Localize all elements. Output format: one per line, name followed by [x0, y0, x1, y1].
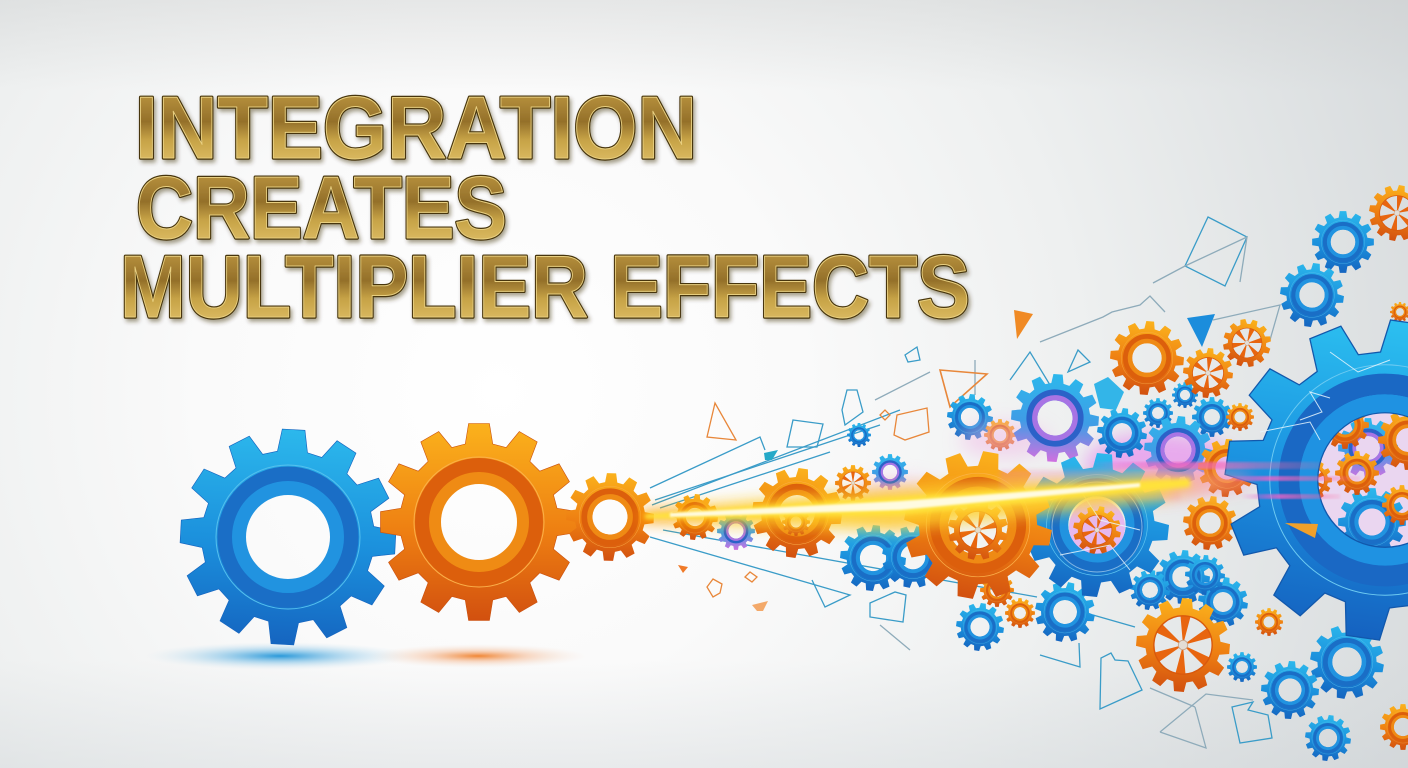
gear: blue mini: [1143, 398, 1173, 428]
gear: orange spoked lower: [1132, 594, 1234, 696]
gear: orange centre inside hole: [1335, 451, 1379, 495]
inner gear in orange 1: [782, 508, 810, 536]
inner detail of blue centre gear: [1069, 499, 1125, 555]
gear: blue large centre: [1018, 446, 1176, 604]
gear: orange edge: [1380, 704, 1408, 750]
title: MULTIPLIER EFFECTS: [120, 237, 970, 336]
title: INTEGRATION: [135, 78, 697, 177]
gear: orange top inside hole: [1321, 401, 1369, 449]
gear: blue small bottom: [953, 600, 1007, 654]
white cracks on gears: [1050, 352, 1390, 572]
gear: blue pair left: [837, 522, 909, 594]
gear: cyan small: [1094, 405, 1150, 461]
big blue gear: [1205, 300, 1408, 660]
gear: blue purple medium: [872, 454, 908, 490]
small triangles and fragments: [678, 310, 1215, 611]
gear: small orange: [565, 472, 655, 562]
gear: orange medium: [835, 465, 871, 501]
gear: orange spoked top: [1181, 346, 1235, 400]
gear: orange right low: [1382, 485, 1408, 525]
gear: blue lower middle: [1030, 577, 1100, 647]
gear: cyan purple cluster left: [1008, 371, 1102, 465]
wireframe lines and polygons: [650, 217, 1280, 748]
gear: orange swirl: [1216, 312, 1278, 374]
gear: purple blue upper: [1141, 413, 1215, 487]
title: [120, 78, 970, 336]
title: CREATES: [136, 158, 507, 257]
gear: blue cluster behind spoked: [1195, 574, 1251, 630]
gear: blue cluster lower right: [1184, 554, 1226, 596]
gear: orange mini: [1226, 403, 1254, 431]
title: MULTIPLIER EFFECTS: [120, 237, 970, 336]
gear: blue cluster middle: [1154, 548, 1212, 606]
gear: blue lower right large: [1304, 619, 1390, 705]
pink glow behind cluster: [850, 422, 1235, 522]
energy beam: [640, 470, 1250, 530]
gear: spoked inside hole: [1292, 460, 1332, 500]
gear: blue pair right: [876, 520, 950, 594]
gear: blue cluster lower left: [1127, 567, 1173, 613]
gear shadows: [145, 642, 588, 670]
gear: blue lower right: [1259, 659, 1321, 721]
far-field gears: [847, 181, 1408, 764]
gear: orange small ring: [980, 573, 1014, 607]
big gear hole contents: [1292, 401, 1408, 556]
gear: tiny orange right: [1390, 302, 1408, 322]
gear: blue mini 2: [1172, 382, 1198, 408]
inner gear in blue centre: [1069, 502, 1125, 558]
inner gear in orange centre: [942, 494, 1014, 566]
title: INTEGRATION: [135, 78, 697, 177]
primary gears: [175, 423, 655, 650]
gear: blue right: [1276, 259, 1348, 331]
gear: blue purple small: [717, 512, 755, 550]
gear: orange tiny lower: [1255, 608, 1283, 636]
gear: blue upper right: [1312, 211, 1374, 273]
gear: purple inside hole: [1338, 418, 1398, 478]
gear: blue top cluster: [945, 392, 995, 442]
gear: blue bottom: [1302, 712, 1354, 764]
gear: large blue: [175, 424, 401, 650]
gear: orange lower centre: [1180, 493, 1240, 553]
gear: large orange: [380, 423, 578, 621]
gear: dark blue behind: [1192, 397, 1232, 437]
small orange triangle on big gear: [1285, 523, 1318, 538]
gear: orange right of centre: [1196, 437, 1258, 499]
gear: blue small centre: [847, 423, 871, 447]
central gear cluster: [670, 346, 1258, 696]
gear: dark blue inside hole: [1338, 488, 1406, 556]
gear: orange large centre: [893, 440, 1063, 610]
gear: orange upper: [1107, 318, 1187, 398]
gear: orange small left: [670, 492, 720, 542]
title: CREATES: [136, 158, 507, 257]
gear: orange right inside hole: [1378, 410, 1408, 470]
rainbow streaks: [1000, 462, 1360, 500]
gear: orange ring: [984, 419, 1016, 451]
gear: blue lower cluster: [1227, 652, 1257, 682]
gear: orange spoked corner: [1365, 181, 1408, 245]
gear: orange 1: [746, 462, 848, 564]
gear: orange small bottom: [1005, 598, 1035, 628]
